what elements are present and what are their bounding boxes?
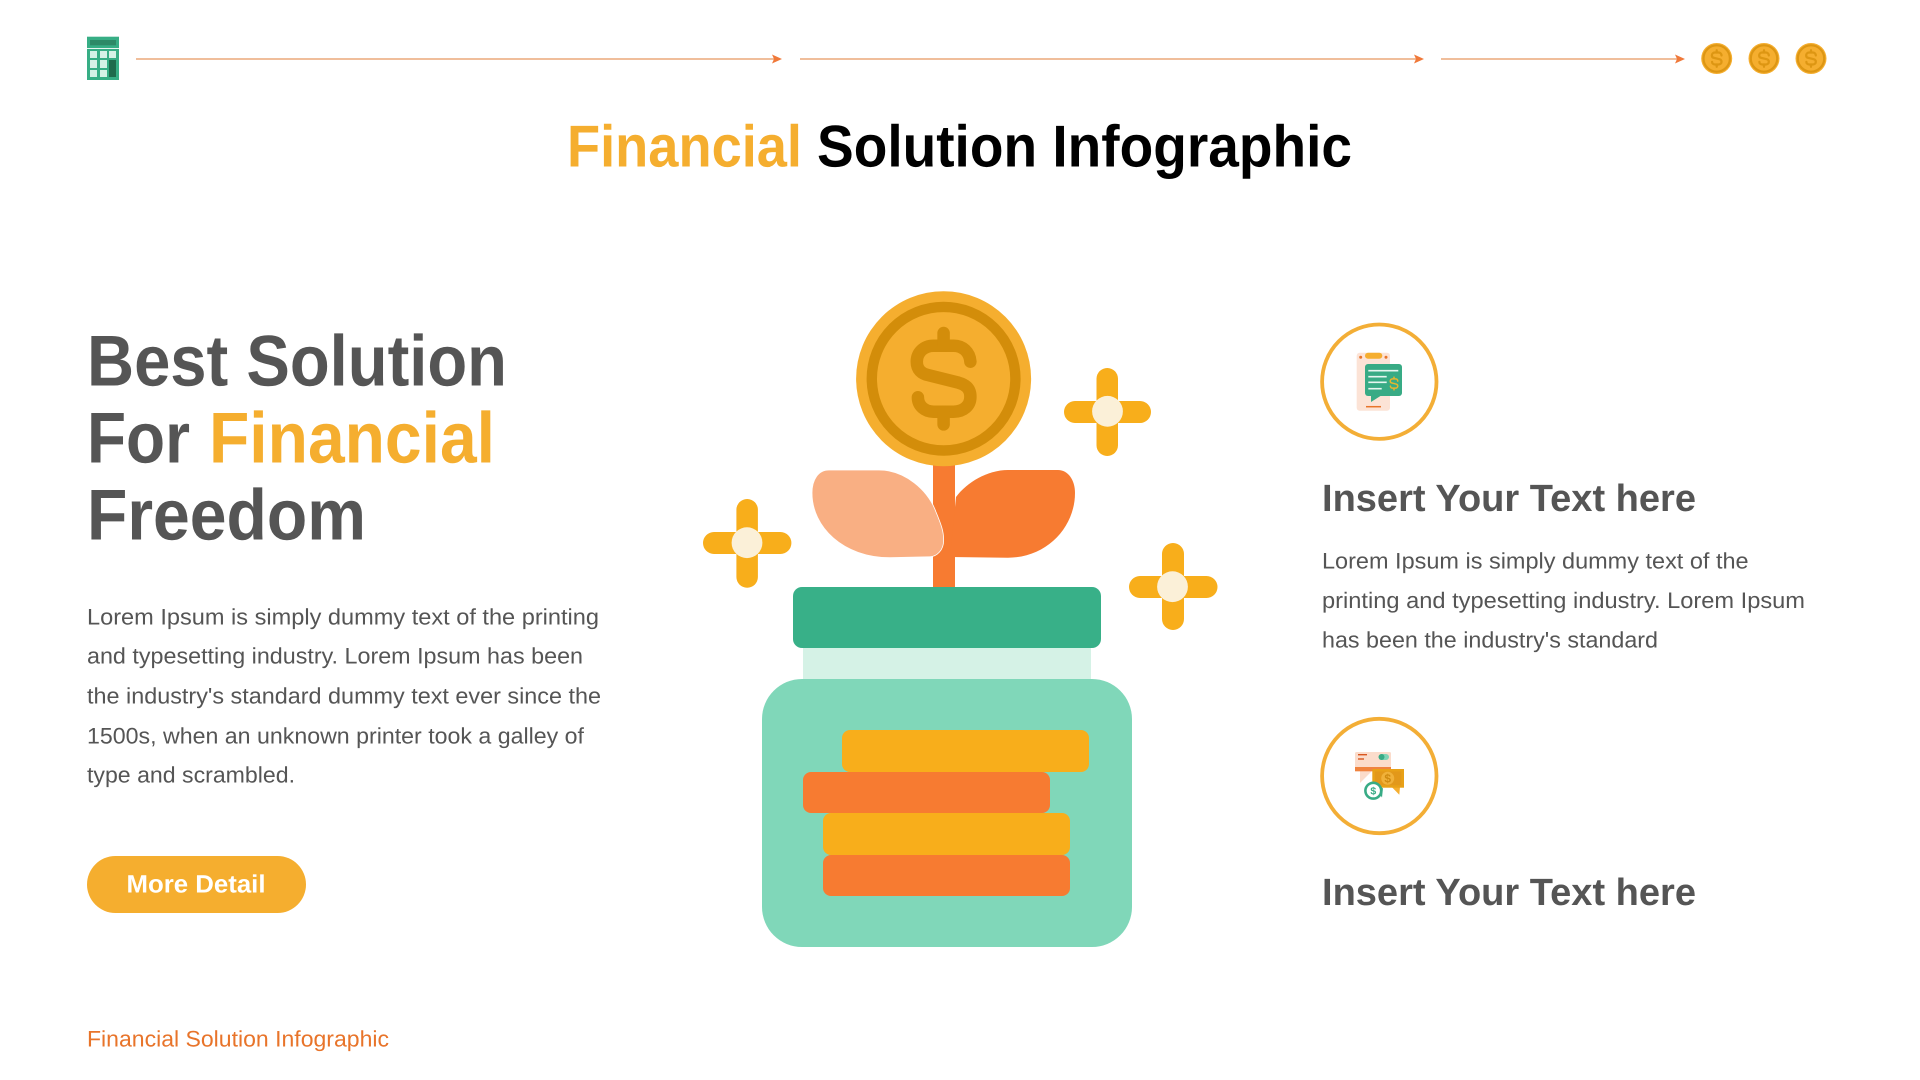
left leaf	[812, 470, 944, 558]
button: more detail: More Detail	[126, 871, 266, 899]
jar body	[762, 679, 1132, 947]
arrow 1	[136, 54, 782, 64]
left paragraph: and typesetting industry. Lorem Ipsum has been	[87, 644, 583, 669]
footer label: Financial Solution Infographic	[87, 1026, 389, 1052]
icon: calculator	[87, 37, 119, 80]
jar lid	[793, 587, 1101, 648]
central illustration: coin plant in jar	[703, 291, 1218, 947]
icon 2: circle with card, banknote and coin bubble: $	[1384, 772, 1391, 786]
flower bottom right	[1129, 543, 1218, 630]
left paragraph: the industry's standard dummy text ever since the	[87, 683, 601, 708]
button: more detail	[87, 856, 306, 913]
left paragraph	[87, 605, 601, 788]
heading: first text block: Insert Your Text here	[1322, 478, 1696, 520]
left paragraph: type and scrambled.	[87, 763, 295, 788]
heading: best solution: Best Solution	[87, 322, 507, 402]
icon: three small coins	[1701, 43, 1826, 74]
right paragraph: printing and typesetting industry. Lorem Ipsum	[1322, 588, 1805, 613]
stacked bars	[803, 730, 1089, 896]
title: Solution Infographic	[817, 114, 1352, 180]
jar neck	[803, 640, 1091, 685]
left paragraph: Lorem Ipsum is simply dummy text of the printing	[87, 605, 599, 630]
title	[567, 114, 1352, 180]
heading: second text block: Insert Your Text here	[1322, 872, 1696, 914]
heading: best solution: Financial	[209, 398, 495, 478]
coin	[856, 291, 1031, 466]
title: Financial	[567, 114, 802, 180]
right paragraph: Lorem Ipsum is simply dummy text of the	[1322, 549, 1749, 574]
heading: best solution: Freedom	[87, 476, 366, 556]
icon 2: circle with card, banknote and coin bubble	[1322, 719, 1437, 833]
right paragraph: has been the industry's standard	[1322, 627, 1658, 652]
right paragraph	[1322, 549, 1805, 652]
heading: best solution: For	[87, 398, 190, 478]
left paragraph: 1500s, when an unknown printer took a galley of	[87, 723, 585, 748]
plant stem	[933, 460, 955, 588]
right leaf	[950, 470, 1075, 558]
arrow 3	[1441, 54, 1685, 64]
arrow 2	[800, 54, 1424, 64]
icon 2: circle with card, banknote and coin bubble: $	[1370, 786, 1376, 798]
flower left	[703, 499, 791, 588]
heading: best solution	[87, 322, 507, 556]
icon 1: circle with clipboard and bill bubble	[1322, 324, 1437, 439]
flower top right	[1064, 368, 1151, 456]
